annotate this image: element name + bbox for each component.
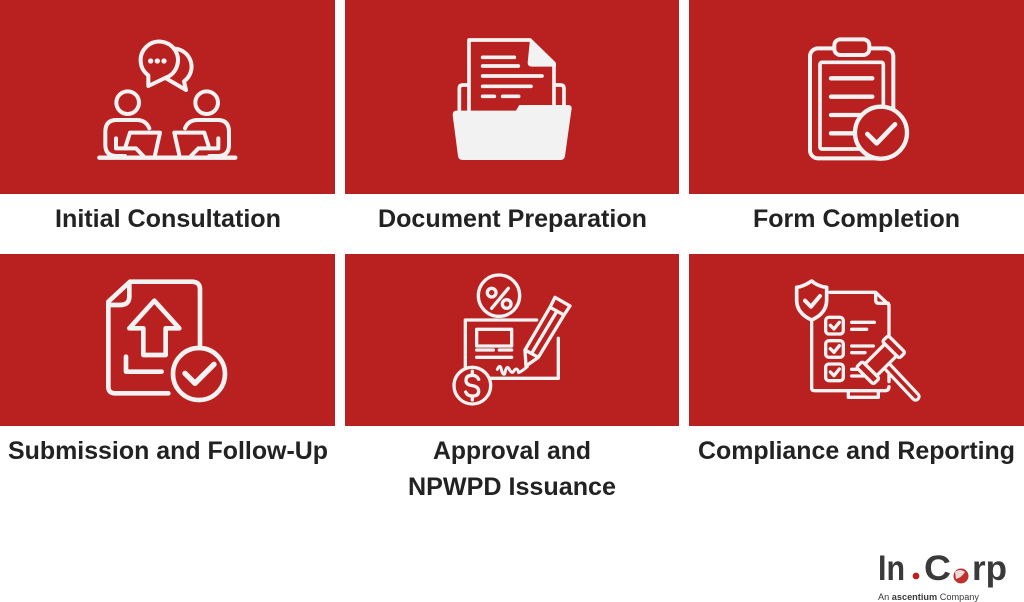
panel: compliance and reporting — [689, 254, 1024, 426]
panel: submission and follow-up — [0, 254, 335, 426]
icon: upload document with check — [108, 282, 225, 400]
panel: approval and issuance — [345, 254, 679, 426]
panel: initial consultation — [0, 0, 335, 194]
icon: signed cheque with percent and dollar — [454, 275, 570, 404]
heading: compliance and reporting: Compliance and Reporting — [698, 437, 1015, 465]
logo: InCorp: In — [878, 549, 905, 588]
panel: document preparation — [345, 0, 679, 194]
panel: form completion — [689, 0, 1024, 194]
heading: approval and NPWPD issuance: Approval and — [433, 437, 591, 465]
logo: InCorp: rp — [972, 549, 1007, 588]
logo: InCorp: C — [924, 549, 951, 588]
icon: folder with document — [453, 39, 572, 160]
heading: document preparation: Document Preparation — [378, 205, 647, 233]
heading: approval and NPWPD issuance — [408, 437, 616, 501]
heading: form completion: Form Completion — [753, 205, 960, 233]
heading: approval and NPWPD issuance: NPWPD Issuance — [408, 473, 616, 501]
icon: clipboard with check — [810, 39, 907, 159]
logo: InCorp — [878, 549, 1007, 602]
logo: InCorp: An ascentium Company — [878, 592, 979, 602]
heading: submission and follow-up: Submission and Follow-Up — [8, 437, 328, 465]
heading: initial consultation: Initial Consultation — [55, 205, 281, 233]
icon: checklist with shield and gavel — [797, 281, 916, 397]
icon: two people in consultation — [99, 42, 235, 158]
